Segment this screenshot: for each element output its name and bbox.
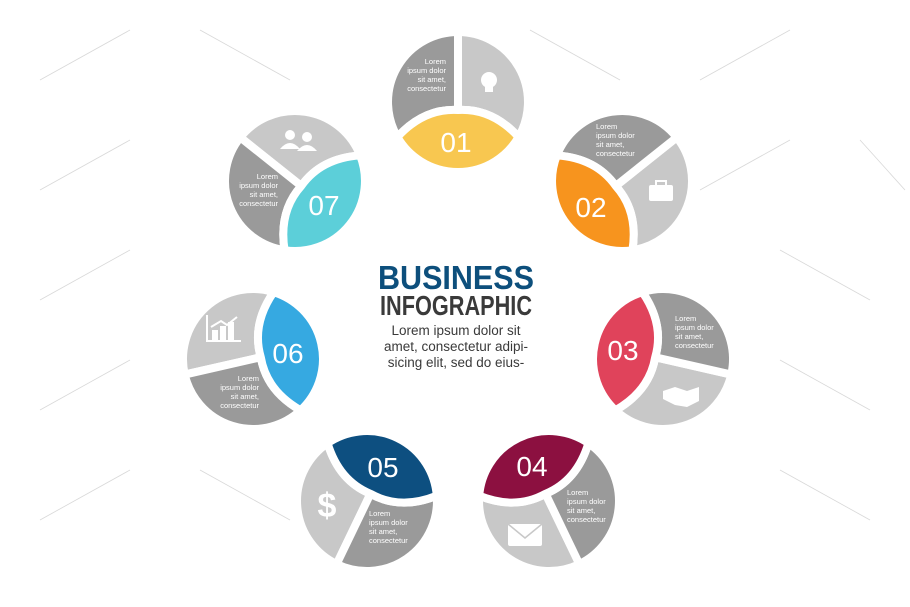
- circle 05: Lorem: [369, 509, 390, 518]
- circle 05: $: [318, 487, 337, 525]
- circle 02: Lorem: [596, 122, 617, 131]
- circle 05: [274, 408, 460, 594]
- title: BUSINESS: [378, 259, 534, 296]
- circle 06: 06: [272, 338, 304, 369]
- circle 07: sit amet,: [250, 190, 278, 199]
- body text: amet, consectetur adipi-: [384, 339, 528, 354]
- circle 05: ipsum dolor: [369, 518, 408, 527]
- circle 03: sit amet,: [675, 332, 703, 341]
- circle 04: 04: [516, 451, 548, 482]
- circle 06: Lorem: [238, 374, 259, 383]
- circle 05: sit amet,: [369, 527, 397, 536]
- circle 06: [169, 275, 337, 443]
- circle 02: ipsum dolor: [596, 131, 635, 140]
- body text: sicing elit, sed do eius-: [388, 355, 524, 370]
- circle 04: Lorem: [567, 488, 588, 497]
- circle 04: [456, 408, 642, 594]
- circle 02: consectetur: [596, 149, 635, 158]
- circle 01: Lorem: [425, 57, 446, 66]
- circle 03: Lorem: [675, 314, 696, 323]
- circle 03: ipsum dolor: [675, 323, 714, 332]
- circle 07: ipsum dolor: [239, 181, 278, 190]
- circle 06: ipsum dolor: [220, 383, 259, 392]
- circle 04: consectetur: [567, 515, 606, 524]
- circle 07: consectetur: [239, 199, 278, 208]
- circle 01: [388, 32, 528, 172]
- circle 07: [197, 83, 393, 279]
- circle 03: consectetur: [675, 341, 714, 350]
- circle 03: [579, 275, 747, 443]
- circle 05: 05: [367, 452, 399, 483]
- circle 07: Lorem: [257, 172, 278, 181]
- circle 01: ipsum dolor: [407, 66, 446, 75]
- circle 04: sit amet,: [567, 506, 595, 515]
- circle 07: 07: [308, 190, 340, 221]
- circle 06: consectetur: [220, 401, 259, 410]
- circle 06: sit amet,: [231, 392, 259, 401]
- title: INFOGRAPHIC: [380, 290, 532, 321]
- circle 04: ipsum dolor: [567, 497, 606, 506]
- body text: Lorem ipsum dolor sit: [391, 323, 521, 338]
- circle 03: 03: [607, 335, 639, 366]
- circle 02: [524, 83, 720, 279]
- circle 01: sit amet,: [418, 75, 446, 84]
- circle 01: consectetur: [407, 84, 446, 93]
- circle 02: 02: [575, 192, 607, 223]
- title: [378, 259, 534, 321]
- circle 01: 01: [440, 127, 472, 158]
- circle 02: sit amet,: [596, 140, 624, 149]
- circle 05: consectetur: [369, 536, 408, 545]
